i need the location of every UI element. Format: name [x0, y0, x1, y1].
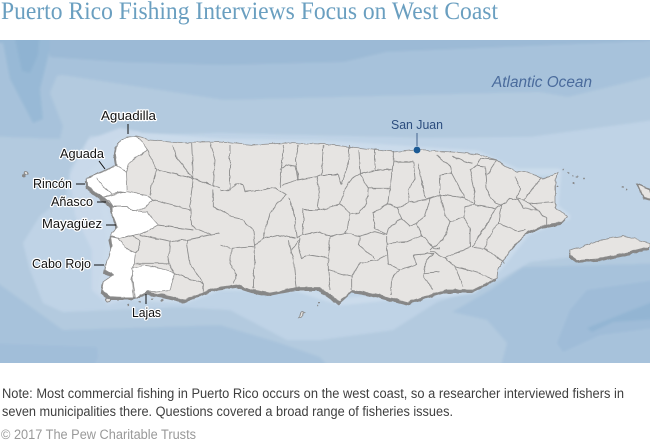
- ocean label: Atlantic Ocean: [491, 74, 592, 91]
- municipal borders west: [118, 143, 220, 292]
- map panel: [0, 40, 650, 363]
- label: Lajas: [132, 294, 161, 320]
- municipal borders central: [220, 145, 440, 295]
- land group: [22, 136, 650, 318]
- municipal borders east: [430, 155, 553, 287]
- main island shadow: [85, 139, 565, 305]
- main island: [87, 136, 567, 302]
- cays and small islands: [22, 169, 628, 318]
- label: San Juan with marker: San Juan: [391, 118, 443, 132]
- ocean depth bands: [0, 40, 650, 363]
- note text: Note: Most commercial fishing in Puerto Rico occurs on the west coast, so a researcher interviewed fishers in: [2, 386, 624, 401]
- note text: seven municipalities there. Questions covered a broad range of fisheries issues.: [2, 404, 453, 419]
- label: Aguada: [60, 146, 105, 169]
- label: San Juan with marker: [391, 118, 443, 153]
- label: Aguada: Aguada: [60, 146, 105, 161]
- label: Lajas: Lajas: [132, 305, 161, 320]
- label: Aguadilla: Aguadilla: [101, 108, 157, 123]
- highlighted west coast municipalities: [87, 136, 175, 298]
- label: Aguadilla: [101, 108, 157, 134]
- label: Añasco: Añasco: [51, 194, 93, 209]
- label: Rincón: Rincón: [33, 176, 72, 191]
- island: Vieques: [569, 236, 650, 263]
- label: Cabo Rojo: Cabo Rojo: [32, 256, 91, 271]
- label: Mayagüez: Mayagüez: [42, 216, 102, 231]
- note text: [2, 386, 624, 419]
- island: Culebra: [637, 184, 650, 200]
- coastal halo: [87, 136, 567, 302]
